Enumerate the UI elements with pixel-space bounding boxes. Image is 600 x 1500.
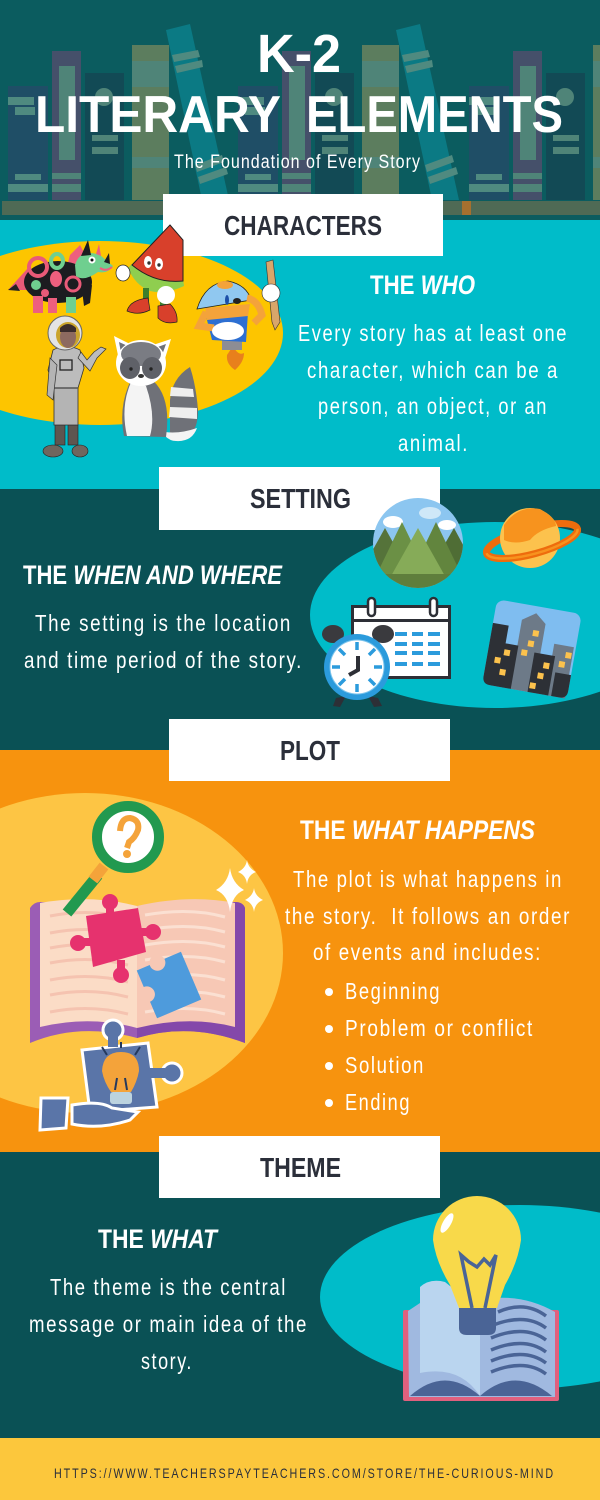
panel: characters [0,194,568,457]
text block: theme description [29,1274,308,1374]
teal ellipse backdrop [320,1205,600,1389]
text block: setting description: and time period of the story. [24,647,303,673]
heading: setting: SETTING [250,483,351,514]
panel: plot [0,719,571,1130]
text block: setting description: The setting is the location [35,610,292,636]
text block: theme description: story. [141,1348,193,1374]
subheading: the when and where: THE WHEN AND WHERE [23,560,283,590]
text block: characters description: person, an object, or an [318,393,548,419]
icon: blue puzzle piece [127,945,201,1021]
subheading: the what: THE WHAT [98,1224,219,1254]
icon: ringed planet [483,508,581,568]
icon: alarm clock [322,625,394,707]
yellow ellipse backdrop [0,241,283,425]
title: K-2 [257,24,341,84]
icon: rocket robot with pencil [197,260,280,370]
panel: setting [23,467,600,708]
icon: pink puzzle piece [70,894,161,983]
bulleted list: plot parts: Problem or conflict [345,1015,534,1041]
heading box: plot [169,719,450,781]
title: LITERARY [35,86,281,144]
section background: setting [0,489,600,750]
header background with bookshelf [0,0,600,221]
panel: theme [29,1136,600,1401]
section background: plot [0,750,600,1152]
icon: raccoon [114,336,198,441]
title: ELEMENTS [306,86,563,144]
heading: plot: PLOT [280,735,340,766]
heading box: characters [163,194,443,256]
subtitle: The Foundation of Every Story [174,152,421,173]
icon: astronaut [43,316,106,457]
icon: city skyline [482,599,582,699]
bulleted list: plot parts [325,978,534,1115]
text block: characters description [298,320,568,456]
footer background [0,1438,600,1500]
icon: calendar [352,598,450,678]
heading: theme: THEME [260,1152,341,1183]
subheading: the what happens: THE WHAT HAPPENS [300,815,535,845]
text block: setting description [24,610,303,673]
icon: book with lightbulb [403,1196,559,1401]
icon: dinosaur [8,240,113,313]
text block: plot description [285,866,571,965]
text block: theme description: The theme is the central [50,1274,287,1300]
icon: watermelon character [116,225,184,323]
subheading: the who: THE WHO [370,270,475,300]
section background: characters [0,220,600,489]
light yellow ellipse backdrop [0,793,283,1113]
icon: open book [30,899,245,1043]
text block: theme description: message or main idea of the [29,1311,308,1337]
heading box: setting [159,467,440,530]
icon: magnifying glass with question mark [67,806,159,913]
heading: characters: CHARACTERS [224,210,382,241]
section background: theme [0,1152,600,1438]
icon: forest [373,498,463,588]
heading box: theme [159,1136,440,1198]
icon: sparkles [216,860,263,912]
bulleted list: plot parts: Ending [345,1089,411,1115]
text block: plot description: of events and includes: [313,939,542,965]
bulleted list: plot parts: Beginning [345,978,441,1004]
bulleted list: plot parts: Solution [345,1052,425,1078]
teal ellipse backdrop [310,522,600,708]
text block: characters description: animal. [398,430,469,456]
icon: lightbulb puzzle on hand [40,1020,182,1130]
title [35,24,563,144]
